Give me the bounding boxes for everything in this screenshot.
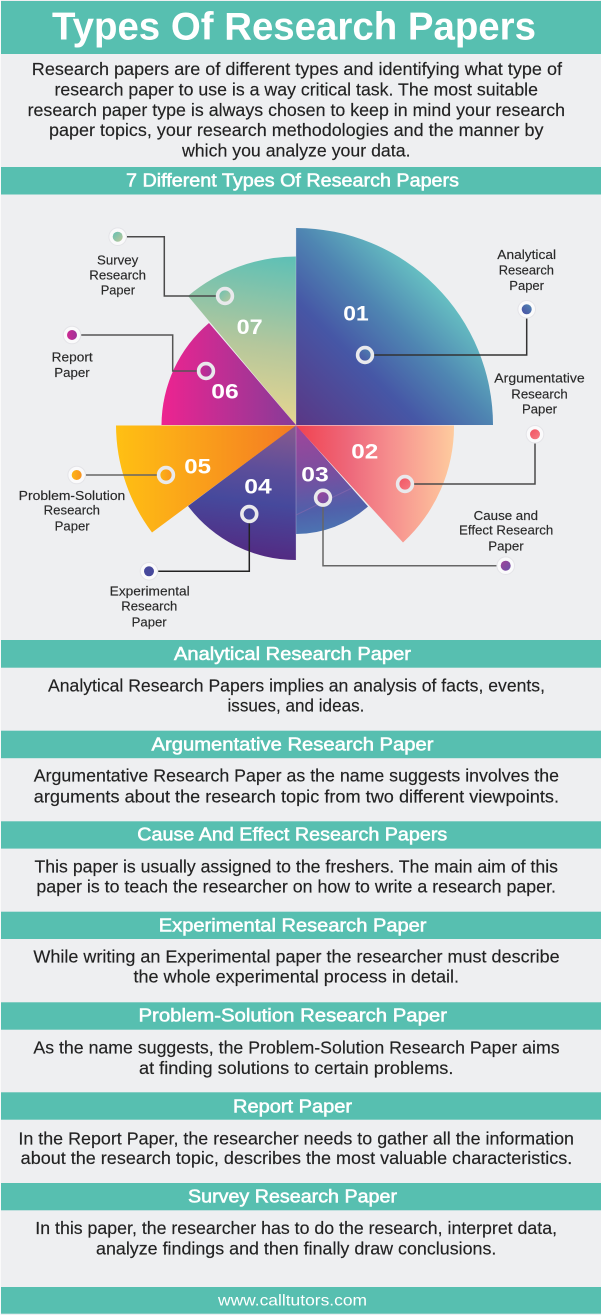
label: report bbox=[52, 326, 93, 380]
panel: report: Report Paper bbox=[233, 1096, 352, 1117]
intro text: which you analyze your data. bbox=[181, 141, 410, 161]
label: cause and effect: Cause and bbox=[474, 508, 538, 523]
segment 06 bbox=[162, 323, 296, 425]
label: experimental: Research bbox=[121, 599, 177, 614]
segment numbers: 06 bbox=[211, 379, 239, 403]
intro text: Research papers are of different types and identifying what type of bbox=[32, 59, 562, 79]
label: report: Report bbox=[52, 349, 93, 364]
section heading bar: 7 Different Types Of Research Papers bbox=[126, 170, 459, 191]
panel: analytical: issues, and ideas. bbox=[228, 696, 364, 716]
segment 03 bbox=[296, 425, 368, 534]
label: cause and effect: Effect Research bbox=[459, 523, 553, 538]
segment 02 bbox=[296, 426, 454, 542]
intro text: research paper type is always chosen to keep in mind your research bbox=[28, 100, 565, 120]
label: survey bbox=[89, 228, 146, 298]
label: survey: Survey bbox=[97, 252, 139, 267]
segment 07 bbox=[188, 256, 296, 425]
panel: experimental: Experimental Research Paper bbox=[159, 915, 427, 936]
panel: survey bbox=[1, 1183, 601, 1258]
segment 01 bbox=[296, 228, 493, 425]
segment numbers bbox=[184, 302, 378, 498]
label: argumentative: Paper bbox=[522, 402, 558, 417]
panel: analytical: Analytical Research Papers implies an analysis of facts, events, bbox=[48, 676, 545, 696]
panel: cause and effect: This paper is usually assigned to the freshers. The main aim of this bbox=[34, 857, 558, 877]
label: problem-solution: Problem-Solution bbox=[19, 488, 125, 503]
panel: survey: In this paper, the researcher has to do the research, interpret data, bbox=[35, 1218, 557, 1238]
segment numbers: 03 bbox=[301, 463, 329, 487]
segmented radial chart bbox=[116, 228, 493, 560]
intro text bbox=[28, 59, 565, 161]
panel: report: In the Report Paper, the researcher needs to gather all the information bbox=[18, 1128, 574, 1148]
label: experimental: Experimental bbox=[110, 584, 190, 599]
panel: problem-solution: As the name suggests, the Problem-Solution Research Paper aims bbox=[33, 1037, 560, 1057]
segment 05 bbox=[116, 426, 296, 532]
label: survey: Paper bbox=[101, 283, 136, 298]
panel: survey: Survey Research Paper bbox=[188, 1186, 397, 1207]
segment 04 bbox=[188, 425, 296, 560]
title banner bbox=[1, 1, 601, 54]
footer bar bbox=[1, 1287, 601, 1314]
panel: analytical: Analytical Research Paper bbox=[174, 643, 411, 664]
panel: argumentative: arguments about the research topic from two different viewpoints. bbox=[34, 787, 559, 807]
panel: experimental bbox=[1, 912, 601, 987]
segment numbers: 02 bbox=[351, 439, 378, 463]
label: analytical: Paper bbox=[509, 278, 545, 293]
segment numbers: 01 bbox=[343, 302, 369, 326]
label: analytical bbox=[497, 247, 556, 318]
label: cause and effect: Paper bbox=[488, 539, 524, 554]
segment numbers: 04 bbox=[244, 474, 272, 498]
title banner: Types Of Research Papers bbox=[52, 6, 536, 48]
segment numbers: 05 bbox=[184, 454, 211, 478]
panel: report bbox=[1, 1092, 601, 1168]
label: experimental bbox=[110, 562, 190, 630]
label: report: Paper bbox=[54, 365, 90, 380]
leader lines bbox=[81, 237, 535, 571]
panel: problem-solution: Problem-Solution Research Paper bbox=[138, 1005, 447, 1026]
label: analytical: Research bbox=[499, 263, 554, 278]
label: problem-solution: Paper bbox=[55, 519, 90, 534]
intro text: paper topics, your research methodologies and the manner by bbox=[49, 120, 544, 140]
panel: cause and effect: Cause And Effect Research Papers bbox=[137, 824, 447, 845]
label: argumentative: Argumentative bbox=[494, 371, 585, 386]
panel: survey: analyze findings and then finally draw conclusions. bbox=[96, 1238, 496, 1258]
label: experimental: Paper bbox=[132, 615, 167, 630]
segment numbers: 07 bbox=[237, 315, 263, 339]
panel: argumentative: Argumentative Research Paper bbox=[152, 734, 434, 755]
panel: cause and effect: paper is to teach the researcher on how to write a research paper. bbox=[36, 877, 556, 897]
footer bar: www.calltutors.com bbox=[217, 1293, 367, 1310]
panel: argumentative: Argumentative Research Paper as the name suggests involves the bbox=[34, 766, 559, 786]
label: analytical: Analytical bbox=[497, 247, 556, 262]
label: cause and effect bbox=[459, 508, 553, 574]
panel: analytical bbox=[1, 640, 601, 716]
panel: cause and effect bbox=[1, 821, 601, 897]
panel: experimental: While writing an Experimental paper the researcher must describe bbox=[33, 947, 560, 967]
panel: experimental: the whole experimental process in detail. bbox=[134, 967, 459, 987]
panel: report: about the research topic, describes the most valuable characteristics. bbox=[21, 1148, 572, 1168]
label: survey: Research bbox=[89, 267, 146, 282]
panel: problem-solution: at finding solutions to certain problems. bbox=[139, 1058, 453, 1078]
label: argumentative: Research bbox=[511, 387, 568, 402]
section heading bar bbox=[1, 167, 601, 194]
panel: problem-solution bbox=[1, 1002, 601, 1078]
ring markers on segments bbox=[159, 289, 412, 521]
label: problem-solution: Research bbox=[44, 503, 100, 518]
intro text: research paper to use is a way critical task. The most suitable bbox=[54, 80, 538, 100]
label: problem-solution bbox=[19, 466, 125, 534]
panel: argumentative bbox=[1, 731, 601, 807]
label: argumentative bbox=[494, 371, 585, 443]
